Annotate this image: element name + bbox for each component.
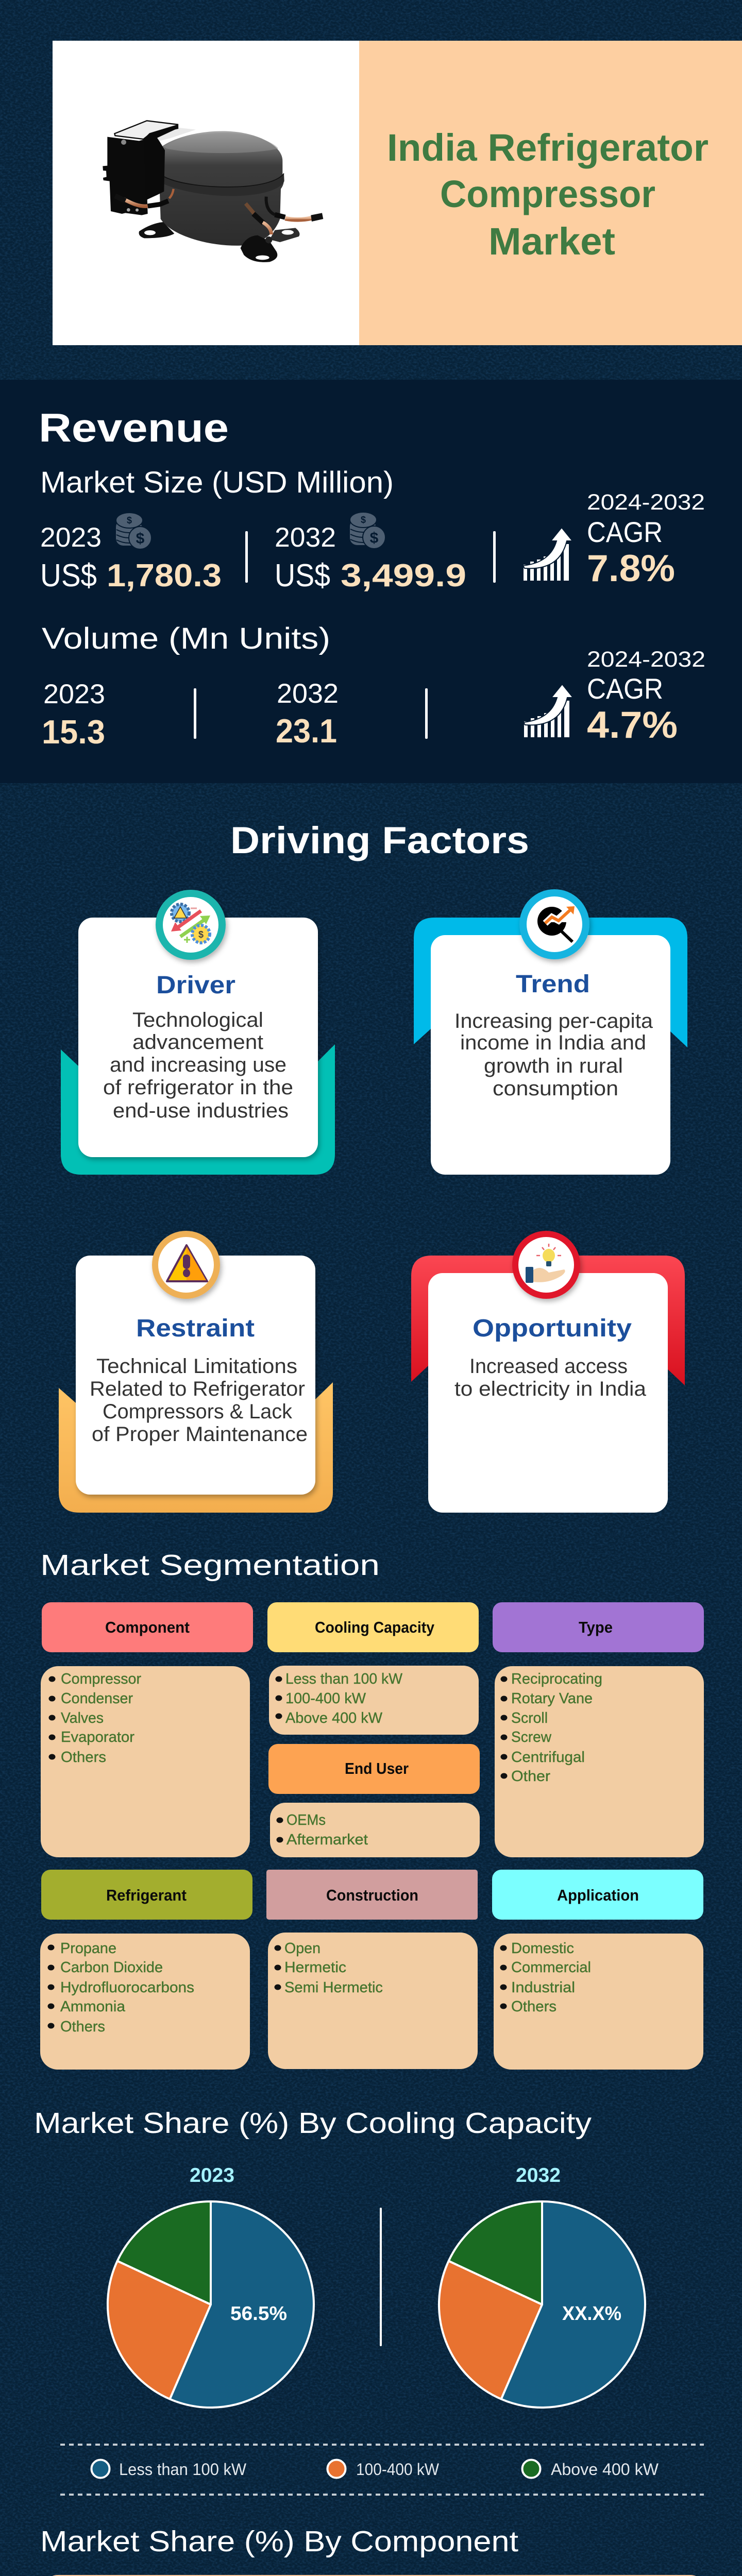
- panel: segmentation construction: [266, 1870, 478, 2069]
- panel: segmentation construction: Hermetic: [284, 1959, 346, 1976]
- panel: segmentation type: Scroll: [511, 1710, 548, 1726]
- text: restraint description: Compressors & Lack: [103, 1400, 293, 1423]
- heading: market segmentation: Market Segmentation: [40, 1549, 380, 1582]
- panel: segmentation refrigerant: Others: [60, 2019, 105, 2035]
- heading: market share by cooling capacity: Market Share (%) By Cooling Capacity: [34, 2107, 592, 2140]
- panel: segmentation cooling capacity: [267, 1602, 479, 1735]
- panel: segmentation component: Evaporator: [61, 1729, 134, 1745]
- legend: cooling capacity: Above 400 kW: [551, 2460, 659, 2479]
- text: driver description: and increasing use: [110, 1054, 286, 1076]
- stat: volume CAGR: [587, 647, 705, 746]
- panel: segmentation refrigerant: Hydrofluorocarbons: [60, 1979, 194, 1996]
- stat: revenue CAGR: [587, 490, 705, 589]
- icon: coins 2032: $: [370, 530, 379, 547]
- pie chart: 2023: [108, 2164, 314, 2408]
- stat: volume 2023: 2023: [43, 679, 105, 709]
- text: trend description: Increasing per-capita: [454, 1010, 653, 1032]
- stat: market size 2023: 2023: [40, 522, 102, 553]
- icon: driver gears and arrows: [156, 890, 226, 960]
- panel: segmentation component: Valves: [61, 1710, 104, 1726]
- stat: revenue CAGR: CAGR: [587, 516, 663, 548]
- panel: restraint: [59, 1231, 333, 1513]
- icon: coins 2023: $: [127, 515, 132, 526]
- panel: segmentation component: Component: [105, 1618, 190, 1636]
- pie chart: 2023: 2023: [190, 2164, 234, 2187]
- panel: segmentation application: Others: [511, 1998, 556, 2015]
- panel: segmentation application: Commercial: [511, 1959, 591, 1976]
- panel: segmentation type: Type: [579, 1618, 613, 1636]
- title: Market: [488, 220, 615, 263]
- icon: coins 2032: $: [361, 515, 366, 525]
- panel: segmentation end user: OEMs: [286, 1812, 326, 1828]
- legend: cooling capacity: Less than 100 kW: [119, 2460, 247, 2479]
- panel: segmentation application: Application: [557, 1886, 639, 1904]
- text: driver description: of refrigerator in the: [103, 1076, 293, 1099]
- heading: trend: Trend: [516, 971, 590, 998]
- icon: trend magnifier: [519, 889, 589, 959]
- title: Compressor: [440, 173, 655, 215]
- stat: volume 2032: [276, 679, 339, 750]
- text: driver description: end-use industries: [113, 1099, 289, 1122]
- text: trend description: growth in rural: [484, 1055, 623, 1077]
- stat: revenue CAGR: 7.8%: [587, 548, 675, 589]
- panel: component charts: [41, 2575, 707, 2576]
- panel: segmentation refrigerant: [40, 1870, 252, 2070]
- legend: cooling capacity: 100-400 kW: [356, 2460, 440, 2479]
- icon: coins 2032: [350, 512, 385, 549]
- icon: driver gears and arrows: $: [198, 929, 204, 940]
- text: trend description: [454, 1010, 653, 1100]
- panel: segmentation component: [41, 1602, 253, 1857]
- panel: segmentation refrigerant: Ammonia: [60, 1998, 126, 2015]
- panel: segmentation cooling capacity: 100-400 kW: [285, 1690, 366, 1707]
- text: trend description: consumption: [493, 1077, 618, 1100]
- panel: segmentation component: Others: [61, 1749, 106, 1766]
- icon: growth chart volume: [524, 684, 573, 737]
- illustration: refrigerator compressor: [103, 121, 323, 262]
- panel: segmentation cooling capacity: Cooling Capacity: [315, 1618, 435, 1636]
- text: opportunity description: [454, 1355, 647, 1400]
- panel: driver: [61, 890, 335, 1175]
- heading: driver: Driver: [156, 972, 235, 999]
- text: opportunity description: to electricity in India: [454, 1378, 647, 1400]
- subheading: market size: Market Size (USD Million): [40, 466, 394, 499]
- text: restraint description: Related to Refrigerator: [90, 1378, 305, 1400]
- panel: opportunity: [411, 1231, 685, 1513]
- panel: segmentation end user: End User: [345, 1759, 409, 1777]
- panel: segmentation refrigerant: Carbon Dioxide: [60, 1959, 163, 1976]
- heading: revenue: Revenue: [39, 405, 229, 450]
- text: restraint description: [90, 1355, 308, 1446]
- panel: trend: [414, 889, 687, 1175]
- subheading: volume: Volume (Mn Units): [42, 622, 330, 655]
- icon: warning triangle: [152, 1231, 220, 1299]
- icon: coins 2023: $: [136, 530, 145, 547]
- stat: market size 2023: 1,780.3: [107, 558, 222, 594]
- text: trend description: income in India and: [460, 1031, 646, 1054]
- text: driver description: advancement: [132, 1031, 263, 1054]
- panel: segmentation component: Compressor: [61, 1671, 141, 1687]
- pie chart: 2032: XX.X%: [562, 2303, 621, 2325]
- stat: volume 2023: 15.3: [42, 713, 105, 751]
- stat: volume 2032: 2032: [277, 679, 339, 709]
- hero panel: [53, 41, 742, 345]
- stat: market size 2032: 3,499.9: [341, 558, 466, 594]
- panel: segmentation type: Screw: [511, 1729, 552, 1745]
- stat: market size 2032: [275, 522, 466, 594]
- heading: restraint: Restraint: [136, 1315, 255, 1342]
- panel: segmentation construction: Construction: [326, 1886, 418, 1904]
- panel: segmentation application: Industrial: [511, 1979, 575, 1996]
- stat: volume CAGR: CAGR: [587, 672, 663, 705]
- heading: market share by component: Market Share (%) By Component: [40, 2525, 518, 2558]
- panel: segmentation component: Condenser: [61, 1690, 133, 1707]
- title: India Refrigerator: [387, 126, 709, 169]
- panel: segmentation construction: Semi Hermetic: [284, 1979, 383, 1996]
- panel: segmentation cooling capacity: Less than 100 kW: [285, 1671, 403, 1687]
- icon: growth chart revenue: [523, 528, 572, 581]
- panel: segmentation end user: Aftermarket: [286, 1832, 368, 1848]
- stat: volume CAGR: 4.7%: [587, 704, 678, 746]
- panel: segmentation refrigerant: Propane: [60, 1940, 116, 1957]
- stat: market size 2023: US$: [40, 558, 97, 594]
- panel: segmentation application: Domestic: [511, 1940, 574, 1957]
- panel: segmentation type: Reciprocating: [511, 1671, 602, 1687]
- pie chart: 2023: 56.5%: [230, 2303, 287, 2325]
- panel: segmentation cooling capacity: Above 400 kW: [285, 1710, 383, 1726]
- stat: market size 2032: 2032: [275, 522, 336, 553]
- heading: driving factors: Driving Factors: [230, 820, 529, 861]
- legend: cooling capacity: [92, 2460, 659, 2479]
- icon: hand with light bulb: [512, 1231, 580, 1299]
- stat: market size 2032: US$: [275, 558, 330, 594]
- stat: volume 2032: 23.1: [276, 712, 337, 750]
- title: [387, 126, 709, 263]
- panel: segmentation refrigerant: Refrigerant: [106, 1886, 187, 1904]
- panel: segmentation type: Other: [511, 1768, 550, 1785]
- pie chart: 2032: 2032: [516, 2164, 561, 2187]
- panel: segmentation application: [492, 1870, 703, 2070]
- text: restraint description: Technical Limitations: [96, 1355, 297, 1378]
- heading: opportunity: Opportunity: [473, 1315, 632, 1342]
- stat: market size 2023: [40, 522, 222, 594]
- icon: coins 2023: [116, 513, 151, 549]
- stat: volume CAGR: 2024-2032: [587, 647, 705, 672]
- stat: revenue CAGR: 2024-2032: [587, 490, 705, 515]
- text: driver description: Technological: [132, 1009, 263, 1031]
- pie chart: 2032: [439, 2164, 645, 2408]
- panel: segmentation end user: [268, 1744, 480, 1857]
- text: driver description: [103, 1009, 293, 1122]
- panel: segmentation construction: Open: [284, 1940, 321, 1957]
- panel: segmentation type: Centrifugal: [511, 1749, 585, 1766]
- panel: segmentation type: [493, 1602, 704, 1857]
- text: opportunity description: Increased access: [469, 1355, 628, 1378]
- stat: volume 2023: [42, 679, 105, 751]
- panel: segmentation type: Rotary Vane: [511, 1690, 593, 1707]
- text: restraint description: of Proper Maintenance: [92, 1423, 308, 1446]
- panel: revenue: [0, 380, 742, 783]
